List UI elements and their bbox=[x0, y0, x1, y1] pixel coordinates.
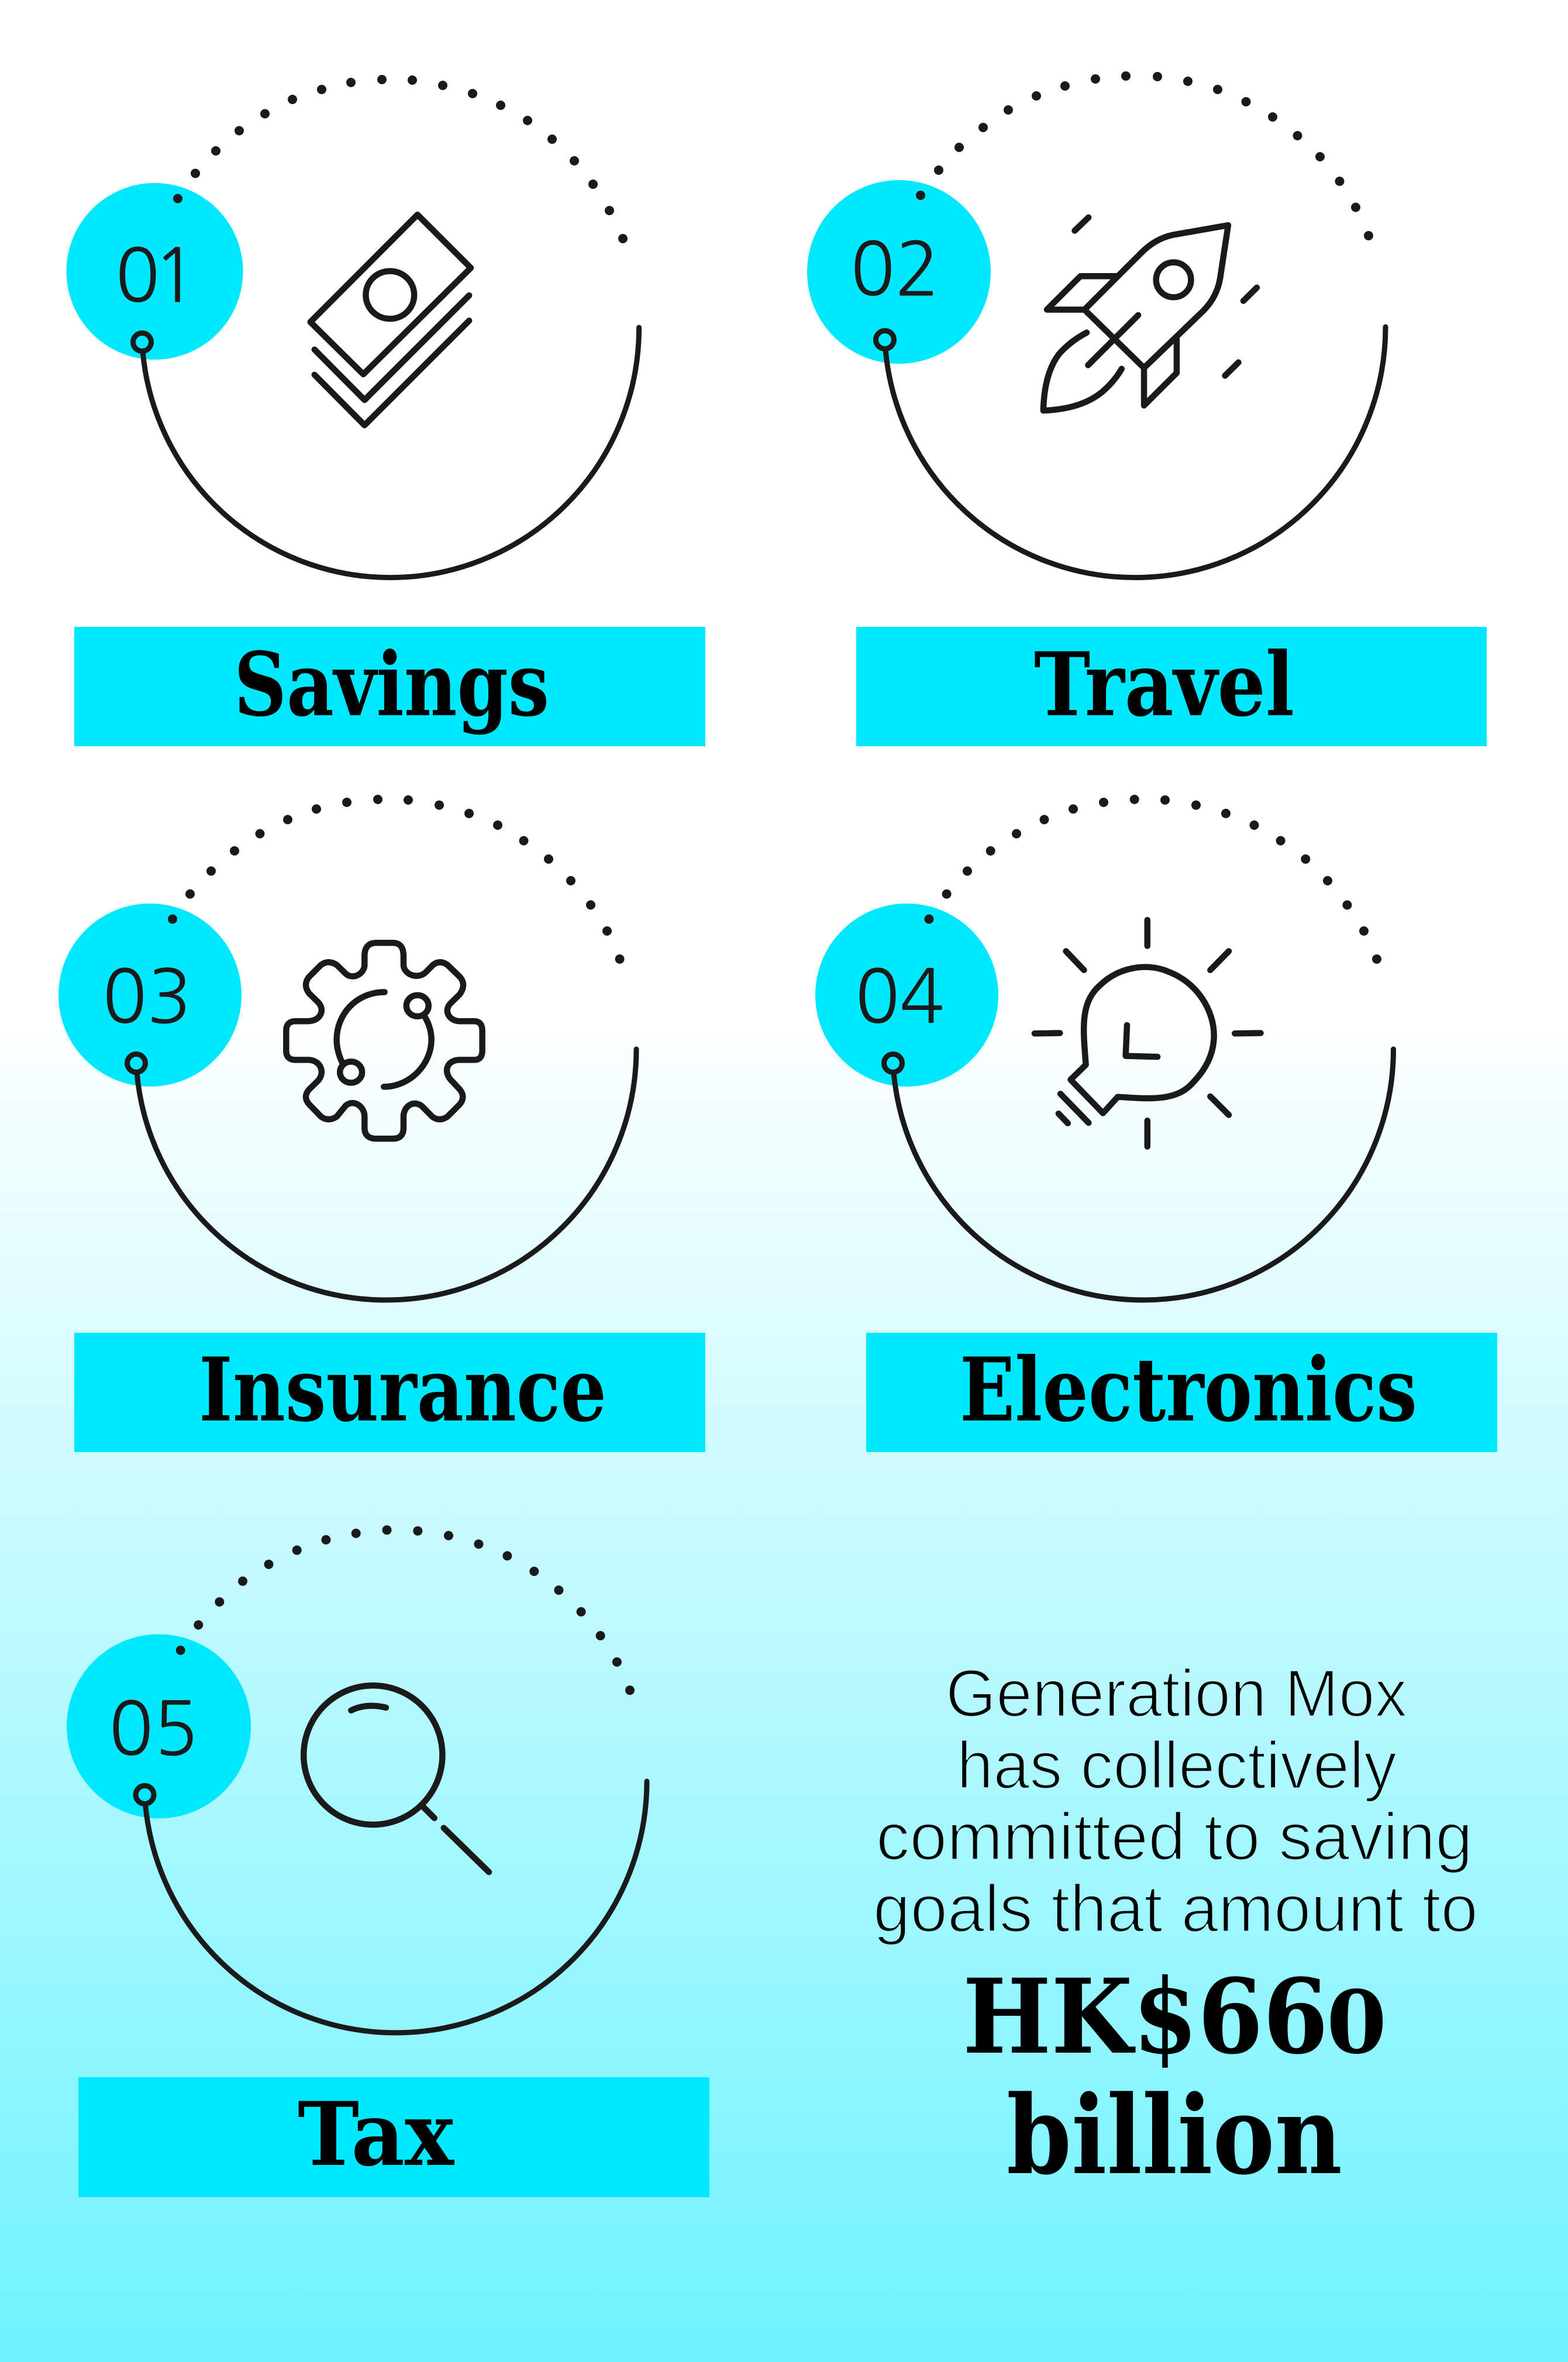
big figure: HK$660 billion bbox=[963, 1956, 1387, 2199]
label bar: Travel: Travel bbox=[1034, 633, 1294, 736]
solid arc with ring bbox=[136, 1781, 647, 2033]
dotted arc bbox=[916, 71, 1373, 240]
solid arc with ring bbox=[876, 327, 1386, 578]
number badge 01 bbox=[67, 183, 243, 360]
number badge 01: 01 bbox=[115, 239, 198, 313]
dotted arc bbox=[176, 1525, 635, 1695]
big figure: HK$660 billion: HK$66 bbox=[963, 1956, 1328, 2077]
panel: savings bbox=[67, 75, 705, 746]
number badge 05 bbox=[67, 1634, 251, 1819]
panel: insurance bbox=[58, 795, 705, 1452]
dotted arc bbox=[173, 75, 628, 243]
label bar: Insurance bbox=[74, 1333, 705, 1452]
icon: light bulb bbox=[1035, 920, 1261, 1147]
solid arc with ring bbox=[127, 1049, 636, 1300]
text block: Generation Mox statement: Generation Mox bbox=[946, 1657, 1407, 1731]
text block: Generation Mox statement: committed to saving bbox=[876, 1800, 1473, 1874]
number badge 03 bbox=[58, 904, 242, 1087]
number badge 04 bbox=[815, 904, 998, 1087]
number badge 04: 04 bbox=[855, 960, 945, 1034]
text block: Generation Mox statement: goals that amount to bbox=[873, 1872, 1478, 1946]
solid arc with ring bbox=[133, 327, 639, 578]
number badge 02 bbox=[807, 180, 991, 364]
big figure: HK$660 billion: 0 bbox=[1326, 1971, 1387, 2073]
solid arc with ring bbox=[884, 1049, 1393, 1300]
label bar: Savings: Savings bbox=[234, 633, 549, 736]
icon: banknotes bbox=[311, 215, 471, 425]
number badge 05: 05 bbox=[109, 1692, 198, 1766]
dotted arc bbox=[924, 795, 1381, 964]
panel: travel bbox=[807, 71, 1487, 746]
icon: gear bbox=[286, 943, 483, 1139]
label bar: Travel bbox=[856, 627, 1487, 746]
label bar: Tax: Tax bbox=[298, 2083, 454, 2186]
text block: Generation Mox statement bbox=[873, 1657, 1478, 1946]
dotted arc bbox=[168, 795, 625, 964]
text block: Generation Mox statement: has collectively bbox=[957, 1729, 1397, 1803]
icon: rocket bbox=[1043, 218, 1257, 411]
label bar: Savings bbox=[74, 627, 705, 746]
label bar: Insurance: Insurance bbox=[199, 1339, 606, 1442]
number badge 03: 03 bbox=[102, 960, 192, 1034]
icon: magnifying glass bbox=[304, 1685, 489, 1872]
number badge 02: 02 bbox=[850, 233, 940, 306]
label bar: Electronics: Electronics bbox=[960, 1339, 1417, 1442]
big figure: HK$660 billion: billion bbox=[1007, 2071, 1342, 2199]
panel: tax bbox=[67, 1525, 709, 2197]
label bar: Tax bbox=[78, 2077, 709, 2197]
panel: electronics bbox=[815, 795, 1497, 1452]
